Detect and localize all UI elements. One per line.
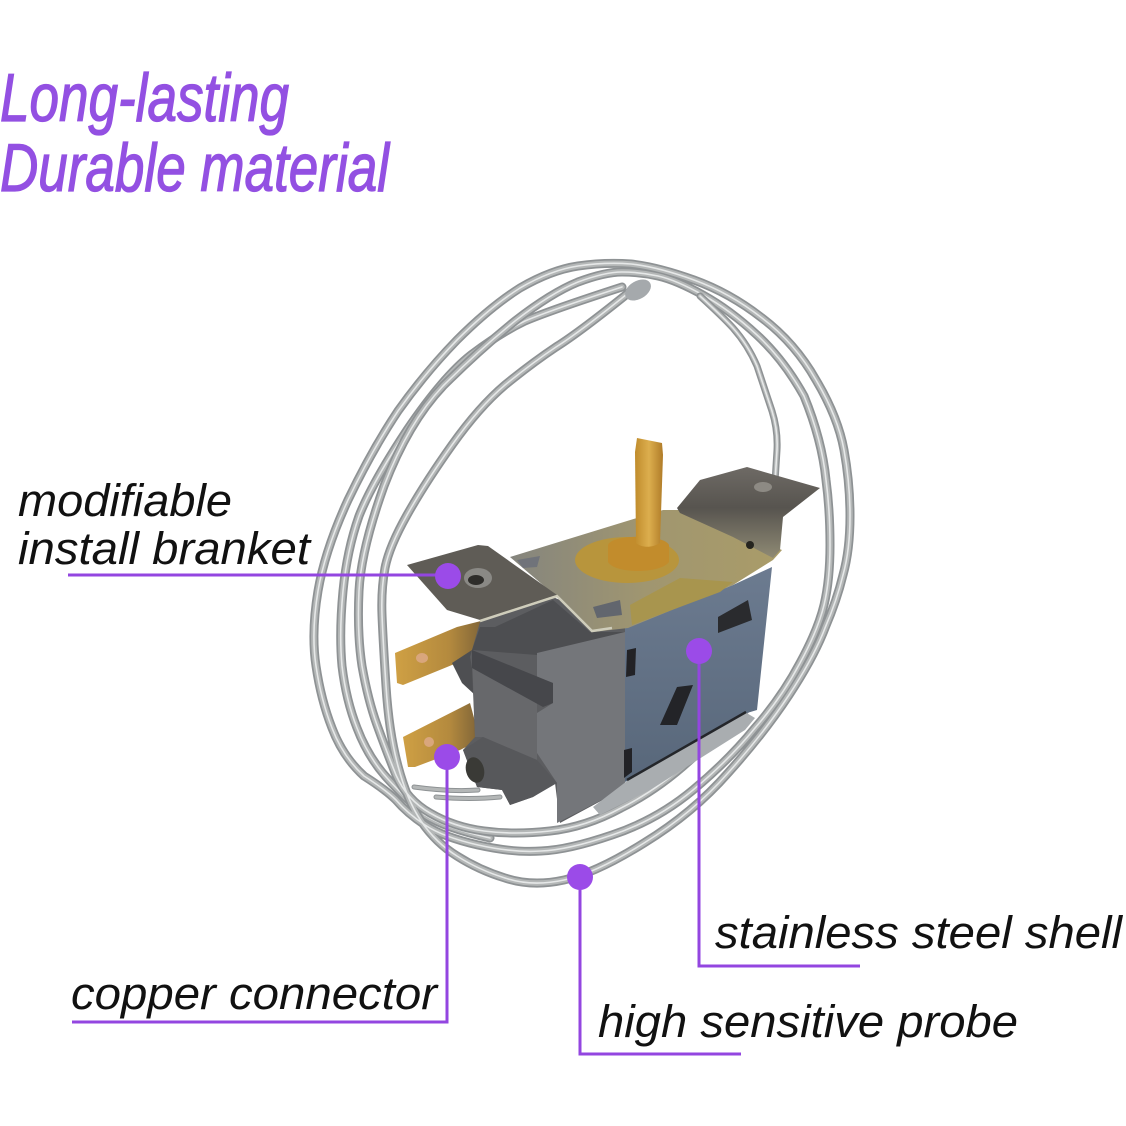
screw boss (463, 737, 557, 805)
callout: modifiable install branket (18, 475, 461, 589)
right mounting bracket (677, 467, 820, 558)
callout: stainless steel shell: stainless steel shell (715, 907, 1124, 958)
plastic body top (472, 600, 625, 655)
top plate (510, 510, 782, 632)
callout: high sensitive probe (567, 864, 1018, 1054)
left mounting bracket (407, 545, 612, 631)
body rib (472, 650, 553, 707)
callout: modifiable install branket: install branket (18, 523, 313, 574)
brass collar (608, 537, 669, 571)
callout: modifiable install branket: modifiable (18, 475, 232, 526)
shell slots (624, 600, 752, 778)
back block (452, 650, 475, 695)
plastic body front (537, 632, 625, 823)
steel shell face (625, 567, 772, 782)
title: Long-lasting (0, 60, 289, 136)
title (0, 60, 390, 206)
plastic body side (472, 655, 537, 760)
thermostat body (395, 438, 820, 823)
bottom clip (593, 712, 755, 815)
callout: copper connector: copper connector (71, 968, 439, 1019)
capillary wire coil (314, 263, 850, 883)
title: Durable material (0, 130, 390, 206)
brass shaft (635, 438, 663, 547)
terminal: upper tab (395, 620, 485, 685)
body silhouette (463, 597, 625, 823)
callout: copper connector (71, 744, 460, 1022)
brass disk (575, 537, 679, 583)
callout: stainless steel shell (686, 638, 1124, 966)
plastic nub (593, 600, 622, 618)
callout: high sensitive probe: high sensitive probe (598, 996, 1018, 1047)
plate inset (630, 578, 733, 625)
screw hole (463, 755, 487, 785)
terminal: lower tab (403, 703, 480, 767)
